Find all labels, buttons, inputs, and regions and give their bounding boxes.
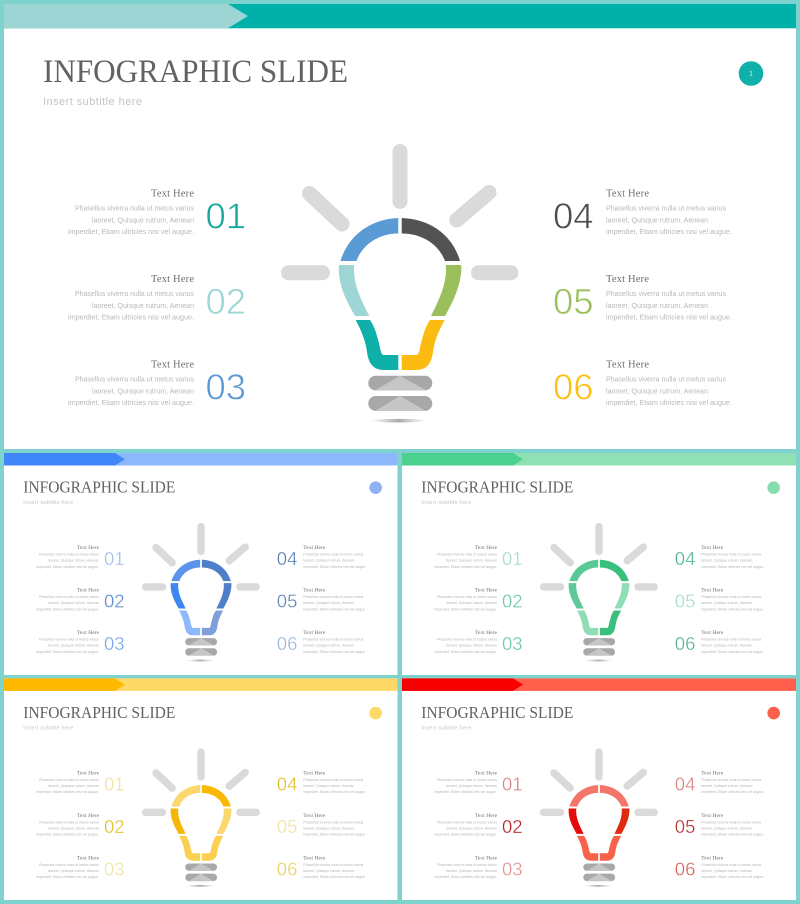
subtitle: Insert subtitle here [23, 725, 73, 731]
item 01: Text Here [151, 188, 194, 200]
item 02: laoreet, Quisque rutrum, Aenean [92, 303, 194, 310]
item 03 [36, 855, 125, 879]
item 05: 05 [675, 590, 695, 612]
item 05: 05 [277, 590, 297, 612]
header bar [4, 4, 796, 28]
panel: red slide [402, 678, 796, 900]
item 02: Phasellus viverra nulla ut metus varius [437, 595, 497, 599]
item 03: laoreet, Quisque rutrum, Aenean [48, 644, 99, 648]
item 04: Text Here [303, 545, 326, 551]
item 03: 03 [502, 633, 523, 654]
item 02: laoreet, Quisque rutrum, Aenean [48, 826, 99, 830]
item 02 [36, 588, 125, 612]
item 05: imperdiet, Etiam ultricies nisi vel augue. [303, 833, 366, 837]
item 03: 03 [104, 633, 125, 654]
item 05: Phasellus viverra nulla ut metus varius [701, 595, 761, 599]
item 01: Text Here [77, 770, 100, 776]
item 01: Phasellus viverra nulla ut metus varius [39, 552, 99, 556]
page number badge [369, 707, 382, 719]
item 02: laoreet, Quisque rutrum, Aenean [446, 601, 497, 605]
item 06 [675, 855, 764, 879]
header bar [402, 678, 796, 691]
item 03: imperdiet, Etiam ultricies nisi vel augue. [36, 875, 99, 879]
item 06 [675, 630, 764, 654]
item 03: Phasellus viverra nulla ut metus varius [39, 863, 99, 867]
item 03: 03 [206, 366, 246, 408]
header bar [4, 678, 398, 691]
item 01: imperdiet, Etiam ultricies nisi vel augue. [36, 565, 99, 569]
item 01: Text Here [77, 545, 100, 551]
item 06: laoreet, Quisque rutrum, Aenean [606, 388, 708, 396]
item 06: imperdiet, Etiam ultricies nisi vel augue. [303, 875, 366, 879]
item 05 [277, 588, 366, 612]
item 04: imperdiet, Etiam ultricies nisi vel augue. [303, 790, 366, 794]
item 02: imperdiet, Etiam ultricies nisi vel augue. [68, 314, 194, 322]
item 01: 01 [104, 773, 125, 794]
item 01 [36, 545, 125, 569]
item 03: Text Here [151, 360, 194, 370]
item 03: imperdiet, Etiam ultricies nisi vel augue. [36, 650, 99, 654]
item 03 [434, 630, 523, 654]
item 05: Phasellus viverra nulla ut metus varius [701, 820, 761, 824]
item 01 [36, 770, 125, 794]
item 01 [68, 188, 246, 236]
title: INFOGRAPHIC SLIDE [421, 703, 573, 722]
item 01: 01 [502, 548, 523, 569]
item 02: Phasellus viverra nulla ut metus varius [39, 595, 99, 599]
item 01: laoreet, Quisque rutrum, Aenean [48, 784, 99, 788]
subtitle: Insert subtitle here [421, 725, 471, 731]
item 01: imperdiet, Etiam ultricies nisi vel augue. [68, 229, 194, 236]
item 03: Text Here [475, 855, 498, 861]
item 04: Text Here [303, 770, 326, 776]
item 06: Text Here [606, 360, 649, 370]
item 06: Text Here [303, 855, 326, 861]
item 06: 06 [675, 858, 695, 879]
item 06: Text Here [303, 630, 326, 636]
item 06 [277, 630, 366, 654]
item 04: Phasellus viverra nulla ut metus varius [701, 552, 761, 556]
item 02 [434, 588, 523, 612]
item 05 [675, 588, 764, 612]
panel: green slide [402, 453, 796, 675]
title: INFOGRAPHIC SLIDE [43, 54, 348, 90]
item 06: Text Here [701, 855, 724, 861]
item 05: Phasellus viverra nulla ut metus varius [303, 595, 363, 599]
page number badge: 1 [749, 72, 753, 78]
item 02: laoreet, Quisque rutrum, Aenean [48, 601, 99, 605]
item 05: imperdiet, Etiam ultricies nisi vel augue. [606, 314, 732, 322]
item 06: 06 [277, 633, 297, 654]
item 02: Text Here [475, 813, 498, 819]
item 04: imperdiet, Etiam ultricies nisi vel augue. [606, 229, 732, 236]
item 04 [675, 545, 764, 569]
item 01: Text Here [475, 545, 498, 551]
item 04: Phasellus viverra nulla ut metus varius [303, 552, 363, 556]
icon: light bulb [146, 527, 256, 661]
item 05: laoreet, Quisque rutrum, Aenean [701, 601, 752, 605]
item 04: laoreet, Quisque rutrum, Aenean [701, 558, 752, 562]
title: INFOGRAPHIC SLIDE [421, 478, 573, 497]
item 01: laoreet, Quisque rutrum, Aenean [446, 558, 497, 562]
item 06: Phasellus viverra nulla ut metus varius [303, 863, 363, 867]
item 06: laoreet, Quisque rutrum, Aenean [701, 644, 752, 648]
item 04: Text Here [701, 545, 724, 551]
page number badge [739, 61, 763, 86]
item 03: Text Here [77, 855, 100, 861]
item 06: 06 [675, 633, 695, 654]
item 06 [277, 855, 366, 879]
item 03: laoreet, Quisque rutrum, Aenean [446, 644, 497, 648]
item 05: Phasellus viverra nulla ut metus varius [606, 291, 726, 298]
item 04: Phasellus viverra nulla ut metus varius [606, 206, 726, 212]
item 01: laoreet, Quisque rutrum, Aenean [446, 784, 497, 788]
item 03: laoreet, Quisque rutrum, Aenean [446, 869, 497, 873]
item 06: imperdiet, Etiam ultricies nisi vel augue. [606, 400, 732, 407]
item 05: Text Here [701, 813, 724, 819]
item 05: 05 [277, 816, 297, 837]
page number badge [767, 707, 780, 719]
item 03: Text Here [475, 630, 498, 636]
icon: light bulb [146, 752, 256, 887]
icon: light bulb [544, 752, 654, 887]
item 05: laoreet, Quisque rutrum, Aenean [701, 826, 752, 830]
item 02: imperdiet, Etiam ultricies nisi vel augue. [36, 833, 99, 837]
item 01: 01 [206, 196, 246, 236]
item 06: imperdiet, Etiam ultricies nisi vel augue. [303, 650, 366, 654]
item 04: laoreet, Quisque rutrum, Aenean [303, 784, 354, 788]
item 05: imperdiet, Etiam ultricies nisi vel augue. [303, 607, 366, 611]
item 06: 06 [277, 858, 297, 879]
item 01: Phasellus viverra nulla ut metus varius [437, 552, 497, 556]
item 01: 01 [502, 773, 523, 794]
item 02 [36, 813, 125, 837]
item 04: imperdiet, Etiam ultricies nisi vel augue. [701, 565, 764, 569]
header bar [4, 453, 398, 466]
item 02: 02 [104, 816, 125, 837]
item 06: laoreet, Quisque rutrum, Aenean [701, 869, 752, 873]
item 06: Phasellus viverra nulla ut metus varius [606, 376, 726, 384]
item 04: Phasellus viverra nulla ut metus varius [701, 778, 761, 782]
item 02: Text Here [151, 274, 194, 285]
item 01: Phasellus viverra nulla ut metus varius [75, 206, 194, 212]
item 04: 04 [553, 196, 594, 236]
item 04: laoreet, Quisque rutrum, Aenean [701, 784, 752, 788]
item 02: 02 [206, 281, 246, 322]
item 05 [277, 813, 366, 837]
item 05: laoreet, Quisque rutrum, Aenean [303, 826, 354, 830]
item 06: Phasellus viverra nulla ut metus varius [701, 863, 761, 867]
item 04: 04 [277, 773, 297, 794]
item 01: laoreet, Quisque rutrum, Aenean [48, 558, 99, 562]
item 06: Phasellus viverra nulla ut metus varius [701, 638, 761, 642]
item 01: imperdiet, Etiam ultricies nisi vel augue. [434, 565, 497, 569]
panel: blue slide [4, 453, 398, 675]
item 03: laoreet, Quisque rutrum, Aenean [92, 388, 194, 396]
item 04: 04 [277, 548, 297, 569]
item 02: Phasellus viverra nulla ut metus varius [437, 820, 497, 824]
item 03 [434, 855, 523, 879]
item 06: imperdiet, Etiam ultricies nisi vel augue. [701, 875, 764, 879]
panel: main teal slide [4, 4, 796, 449]
item 04: imperdiet, Etiam ultricies nisi vel augue. [303, 565, 366, 569]
subtitle: Insert subtitle here [421, 500, 471, 506]
item 03: imperdiet, Etiam ultricies nisi vel augue. [434, 650, 497, 654]
item 03: Phasellus viverra nulla ut metus varius [437, 863, 497, 867]
item 05: Text Here [303, 813, 326, 819]
header bar [402, 453, 796, 466]
panel: yellow slide [4, 678, 398, 900]
item 06: Text Here [701, 630, 724, 636]
item 03: Phasellus viverra nulla ut metus varius [437, 638, 497, 642]
item 04: imperdiet, Etiam ultricies nisi vel augue. [701, 790, 764, 794]
item 01: laoreet, Quisque rutrum, Aenean [92, 218, 194, 224]
item 02: imperdiet, Etiam ultricies nisi vel augue. [36, 607, 99, 611]
item 06 [553, 360, 732, 408]
item 02: 02 [502, 816, 523, 837]
item 02: 02 [502, 590, 523, 612]
item 04 [277, 770, 366, 794]
item 05: 05 [675, 816, 695, 837]
item 05 [675, 813, 764, 837]
page number badge [767, 481, 780, 494]
subtitle: Insert subtitle here [23, 500, 73, 506]
item 04: 04 [675, 548, 695, 569]
item 01: Phasellus viverra nulla ut metus varius [437, 778, 497, 782]
item 01 [434, 545, 523, 569]
item 03: 03 [104, 858, 125, 879]
item 01: Text Here [475, 770, 498, 776]
item 03 [68, 360, 246, 408]
subtitle: Insert subtitle here [43, 96, 142, 108]
item 05: imperdiet, Etiam ultricies nisi vel augue. [701, 607, 764, 611]
item 02: Phasellus viverra nulla ut metus varius [75, 291, 194, 298]
title: INFOGRAPHIC SLIDE [23, 703, 175, 722]
item 02: 02 [104, 590, 125, 612]
item 04: Phasellus viverra nulla ut metus varius [303, 778, 363, 782]
item 03: laoreet, Quisque rutrum, Aenean [48, 869, 99, 873]
item 02: imperdiet, Etiam ultricies nisi vel augue. [434, 607, 497, 611]
item 06: imperdiet, Etiam ultricies nisi vel augue. [701, 650, 764, 654]
item 04 [553, 188, 732, 236]
item 02: laoreet, Quisque rutrum, Aenean [446, 826, 497, 830]
item 02: Text Here [475, 588, 498, 594]
item 03 [36, 630, 125, 654]
item 05: Text Here [303, 588, 326, 594]
item 04: 04 [675, 773, 695, 794]
item 06: 06 [553, 366, 594, 408]
item 04 [675, 770, 764, 794]
item 03: 03 [502, 858, 523, 879]
item 05: 05 [553, 281, 594, 322]
item 04: laoreet, Quisque rutrum, Aenean [303, 558, 354, 562]
item 05: Text Here [606, 274, 649, 285]
item 01 [434, 770, 523, 794]
item 05: Phasellus viverra nulla ut metus varius [303, 820, 363, 824]
item 03: Phasellus viverra nulla ut metus varius [75, 376, 194, 384]
item 02: imperdiet, Etiam ultricies nisi vel augue. [434, 833, 497, 837]
icon: light bulb [544, 527, 654, 661]
item 04: Text Here [701, 770, 724, 776]
item 01: Phasellus viverra nulla ut metus varius [39, 778, 99, 782]
item 03: Text Here [77, 630, 100, 636]
item 04: laoreet, Quisque rutrum, Aenean [606, 218, 708, 224]
icon: light bulb [288, 152, 511, 423]
item 02: Text Here [77, 813, 100, 819]
item 02: Phasellus viverra nulla ut metus varius [39, 820, 99, 824]
page number badge [369, 481, 382, 494]
item 03: imperdiet, Etiam ultricies nisi vel augue. [434, 875, 497, 879]
item 01: imperdiet, Etiam ultricies nisi vel augue. [434, 790, 497, 794]
item 02 [68, 274, 246, 322]
item 06: laoreet, Quisque rutrum, Aenean [303, 869, 354, 873]
item 05: imperdiet, Etiam ultricies nisi vel augue. [701, 833, 764, 837]
item 01: imperdiet, Etiam ultricies nisi vel augue. [36, 790, 99, 794]
item 01: 01 [104, 548, 125, 569]
item 02: Text Here [77, 588, 100, 594]
item 04: Text Here [606, 188, 649, 200]
item 06: laoreet, Quisque rutrum, Aenean [303, 644, 354, 648]
title: INFOGRAPHIC SLIDE [23, 478, 175, 497]
item 03: imperdiet, Etiam ultricies nisi vel augue. [68, 400, 194, 407]
item 04 [277, 545, 366, 569]
item 06: Phasellus viverra nulla ut metus varius [303, 638, 363, 642]
item 05 [553, 274, 732, 322]
item 03: Phasellus viverra nulla ut metus varius [39, 638, 99, 642]
item 05: Text Here [701, 588, 724, 594]
item 05: laoreet, Quisque rutrum, Aenean [303, 601, 354, 605]
item 02 [434, 813, 523, 837]
item 05: laoreet, Quisque rutrum, Aenean [606, 303, 708, 310]
